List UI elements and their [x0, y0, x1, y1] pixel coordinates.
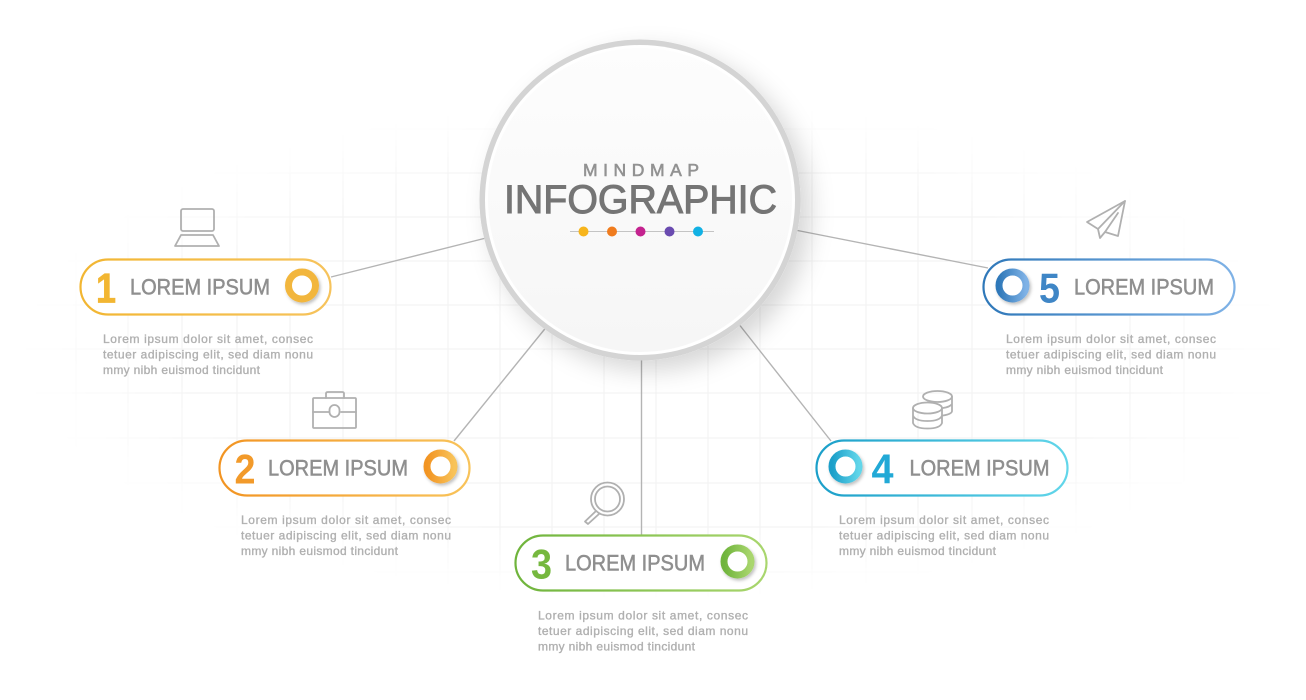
pill 2	[220, 440, 470, 496]
text 1: tetuer adipiscing elit, sed diam nonu	[103, 348, 313, 362]
ring 1	[288, 272, 316, 299]
label 3: LOREM IPSUM	[565, 550, 705, 576]
icon: coins	[913, 391, 952, 428]
title: infographic: INFOGRAPHIC	[504, 178, 777, 222]
icon: paper plane	[1087, 201, 1125, 238]
panel 2	[220, 392, 470, 558]
text 1: Lorem ipsum dolor sit amet, consec	[103, 332, 313, 346]
icon: laptop	[175, 209, 219, 246]
panel 4	[816, 391, 1068, 558]
pill 3	[516, 536, 766, 590]
ring 5	[999, 272, 1026, 299]
panel 5	[984, 201, 1234, 377]
colour dots	[570, 226, 714, 236]
text 1: mmy nibh euismod tincidunt	[103, 363, 261, 377]
text 1	[103, 332, 313, 377]
label 5: LOREM IPSUM	[1074, 274, 1214, 300]
icon: magnifier	[585, 482, 624, 524]
text 5	[1006, 332, 1216, 377]
number 1: 1	[96, 264, 116, 312]
text 3: mmy nibh euismod tincidunt	[538, 640, 696, 654]
panel 1	[80, 209, 330, 377]
text 3: tetuer adipiscing elit, sed diam nonu	[538, 624, 748, 638]
text 5: Lorem ipsum dolor sit amet, consec	[1006, 332, 1216, 346]
pill 1	[80, 260, 330, 314]
text 5: mmy nibh euismod tincidunt	[1006, 363, 1164, 377]
number 2: 2	[234, 446, 256, 492]
title: mindmap: MINDMAP	[583, 160, 699, 180]
central circle	[480, 40, 800, 360]
text 2	[241, 513, 451, 558]
text 3	[538, 608, 748, 654]
text 4: Lorem ipsum dolor sit amet, consec	[839, 513, 1049, 527]
ring 3	[724, 548, 751, 575]
text 4	[839, 513, 1049, 558]
number 3: 3	[531, 540, 552, 588]
pill 5	[984, 260, 1234, 314]
connector lines	[331, 230, 988, 535]
number 5: 5	[1039, 264, 1060, 312]
label 2: LOREM IPSUM	[268, 456, 408, 480]
label 4: LOREM IPSUM	[910, 456, 1050, 480]
text 4: mmy nibh euismod tincidunt	[839, 544, 997, 558]
text 2: Lorem ipsum dolor sit amet, consec	[241, 513, 451, 527]
label 1: LOREM IPSUM	[130, 274, 270, 300]
text 4: tetuer adipiscing elit, sed diam nonu	[839, 528, 1049, 542]
text 3: Lorem ipsum dolor sit amet, consec	[538, 608, 748, 622]
text 5: tetuer adipiscing elit, sed diam nonu	[1006, 348, 1216, 362]
icon: toolbox	[313, 392, 356, 428]
ring 4	[832, 453, 859, 480]
panel 3	[516, 482, 766, 654]
text 2: tetuer adipiscing elit, sed diam nonu	[241, 528, 451, 542]
ring 2	[427, 453, 454, 480]
pill 4	[816, 440, 1068, 496]
text 2: mmy nibh euismod tincidunt	[241, 544, 399, 558]
number 4: 4	[872, 446, 894, 492]
